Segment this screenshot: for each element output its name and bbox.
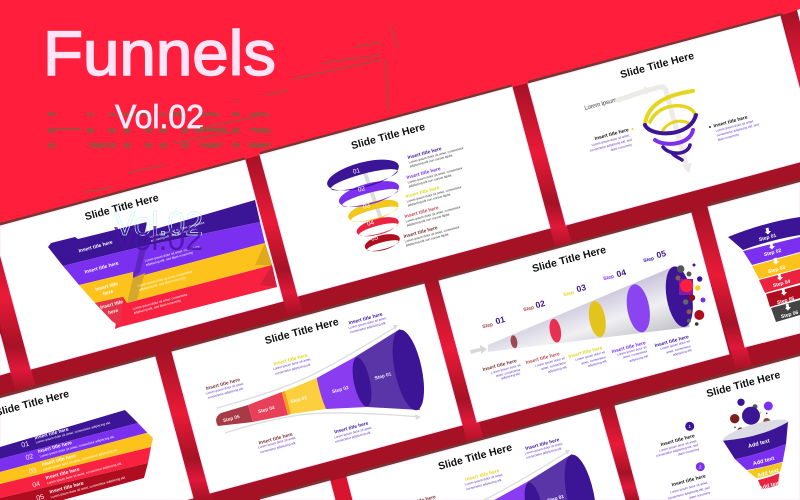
ghost Vol.02 artefact: Vol.02 [114, 205, 203, 242]
ghost Vol.02 artefact: Vol.02 [114, 220, 203, 257]
cone [488, 264, 697, 352]
band labels: Lorem ipsum dolor sit amet, consectetur [149, 220, 206, 239]
stacked bands [0, 410, 153, 500]
step captions: amet, consectetur [622, 349, 649, 360]
step headings: Step [603, 274, 615, 282]
slide title: Slide Title Here [705, 369, 782, 400]
band numbers [21, 441, 45, 500]
ring captions: adipiscing elit non cursus ligula. [408, 173, 453, 188]
ring numbers: 02 [357, 185, 366, 194]
band numbers: 01 [21, 441, 30, 449]
ghost Vol.02 artefact [114, 210, 202, 250]
step labels: Step 01 [758, 233, 777, 243]
item 1: 1 [688, 424, 691, 429]
step headings: 02 [534, 298, 546, 310]
slide: stacked 3D bands [0, 357, 193, 500]
item 1: Insert title here [660, 433, 696, 448]
right caption: Insert title here [713, 114, 749, 129]
step headings [482, 248, 667, 330]
step labels: Step 04 [257, 405, 276, 415]
band text [34, 420, 126, 499]
captions: Insert title here [525, 437, 560, 452]
step labels: Step 03 [767, 265, 786, 275]
item 2: diam nonummy [689, 490, 711, 500]
ring captions: Insert title here [407, 146, 443, 161]
left caption: diam nonummy [610, 142, 633, 152]
funnel labels: Add text [758, 480, 781, 492]
band text: Insert title here [45, 466, 81, 481]
step captions: adipiscing elit [629, 354, 649, 363]
item 1: consectetur adipiscing elit, sed [656, 443, 699, 458]
slide title: Slide Title Here [619, 50, 696, 81]
band text: Lorem ipsum dolor sit amet, consectetur adipiscing elit. [35, 420, 111, 444]
particles [676, 264, 706, 326]
slide: layered bands funnel [0, 160, 283, 369]
ring captions: adipiscing elit non cursus ligula. [409, 153, 454, 168]
ring captions: Insert title here [403, 225, 439, 240]
captions: Insert title here [334, 421, 369, 435]
band labels: Insert title [100, 299, 124, 311]
ring captions: adipiscing elit non cursus ligula. [405, 232, 450, 247]
captions: Lorem ipsum dolor sit amet, [524, 441, 563, 456]
step captions: adipiscing elit [672, 348, 692, 357]
step headings: 01 [494, 314, 506, 326]
step headings: Step [563, 290, 575, 298]
band labels: Lorem ipsum dolor sit amet, consectetur [144, 244, 201, 263]
ring captions: Lorem ipsum dolor sit amet, consectetur [407, 166, 464, 184]
band text: Insert title here [41, 453, 77, 468]
step headings: 05 [655, 248, 667, 260]
ring numbers: 05 [370, 234, 379, 243]
slide title: Slide Title Here [531, 244, 608, 275]
slide: particle funnel [615, 356, 800, 500]
captions: Lorem ipsum dolor sit amet, [464, 472, 503, 487]
ring captions: Insert title here [405, 185, 441, 200]
item 2: 2 [699, 464, 702, 469]
step captions: Lorem ipsum dolor sit [575, 350, 605, 362]
captions: Insert title here [465, 468, 500, 483]
step arrows [765, 228, 791, 310]
step labels: Step 05 [222, 414, 241, 424]
captions: Insert title here [205, 377, 241, 392]
heading: volume: Vol.02 [115, 98, 204, 135]
ring captions: Insert title here [404, 205, 440, 220]
step headings: 04 [615, 267, 627, 279]
step captions: adipiscing elit [501, 372, 520, 380]
item 2: Lorem ipsum dolor sit amet, [670, 480, 709, 494]
slide sliver left [0, 334, 10, 375]
right caption: Lorem ipsum dolor sit amet, [715, 119, 754, 133]
funnel labels: Add text [757, 468, 780, 479]
captions: Lorem ipsum dolor sit amet, [273, 357, 312, 371]
horn funnel graphic [216, 325, 430, 433]
item 2: Insert title here [671, 473, 707, 488]
captions: consectetur adipiscing elit. [349, 321, 387, 334]
step captions: amet, consectetur [666, 344, 692, 355]
band text: Insert title here [34, 426, 70, 441]
slide sliver bottom [260, 481, 335, 500]
funnel labels [748, 438, 781, 492]
captions: Lorem ipsum dolor sit amet, [205, 381, 244, 396]
funnel bands [48, 200, 277, 329]
band labels: Lorem ipsum dolor sit amet, consectetur [132, 292, 189, 311]
slide: horizontal cone funnel [439, 213, 729, 422]
captions: consectetur adipiscing elit. [274, 362, 312, 376]
step labels: Step 02 [763, 248, 782, 258]
slide: horn funnel [172, 284, 462, 493]
band labels: Insert title [95, 281, 119, 293]
band labels: Lorem ipsum dolor sit amet, consectetur [137, 269, 194, 288]
step captions [482, 334, 692, 380]
step labels: Step 01 [374, 371, 392, 382]
slide title: Slide Title Here [84, 192, 160, 223]
band text: Lorem ipsum dolor sit amet, consectetur adipiscing elit. [50, 475, 126, 499]
captions: consectetur adipiscing elit. [465, 478, 503, 491]
band text: Insert title here [37, 440, 73, 455]
band labels: Insert title here [84, 261, 120, 275]
ring captions: Lorem ipsum dolor sit amet, consectetur [406, 185, 463, 203]
band labels: here [107, 308, 119, 316]
band labels: Insert title here [78, 240, 114, 254]
ring captions: Lorem ipsum dolor sit amet, consectetur [405, 205, 462, 223]
heading ghost stripes: Funnels [43, 91, 276, 161]
item 1: diam nonummy [677, 447, 700, 457]
band numbers: 02 [25, 453, 34, 462]
captions: consectetur adipiscing elit. [334, 430, 372, 444]
captions: Insert title here [258, 432, 294, 446]
captions: Insert title here [348, 312, 384, 326]
ring numbers [352, 167, 379, 243]
step labels: Step 06 [780, 310, 799, 320]
step headings: Step [643, 256, 655, 264]
captions: Lorem ipsum dolor sit amet, [258, 435, 297, 450]
band text: Lorem ipsum dolor sit amet, consectetur adipiscing elit. [43, 448, 119, 472]
left caption: Lorem ipsum dolor sit amet, [591, 133, 630, 147]
spiral funnel graphic [618, 86, 696, 173]
ring numbers: 04 [366, 219, 375, 228]
horn funnel graphic [389, 450, 602, 500]
ring captions: Lorem ipsum dolor sit amet, consectetur [408, 146, 465, 164]
funnel labels: Add text [752, 456, 775, 467]
band text: Lorem ipsum dolor sit amet, consectetur adipiscing elit. [47, 461, 123, 485]
step captions: Insert title here [568, 345, 603, 360]
step labels: Step 03 [290, 395, 308, 405]
captions: Insert title here [273, 353, 309, 367]
slide sliver top right [797, 9, 800, 22]
right caption: consectetur adipiscing elit, sed [716, 122, 759, 137]
band text: Lorem ipsum dolor sit amet, consectetur adipiscing elit. [39, 434, 115, 458]
slide: horn funnel bottom [347, 409, 625, 500]
captions [205, 312, 387, 454]
step captions: Insert title here [654, 334, 690, 349]
left caption [589, 127, 634, 153]
step captions: amet, consectetur [495, 367, 522, 378]
step headings: Step [482, 322, 494, 330]
band labels: adipiscing elit, sed diam nonummy [145, 250, 194, 267]
input arrow [470, 345, 487, 354]
slide: ring funnel [260, 87, 550, 296]
band labels: adipiscing elit, sed diam nonummy [150, 226, 199, 243]
step labels [222, 371, 392, 424]
step captions: Lorem ipsum dolor sit [535, 356, 565, 368]
step labels [758, 233, 799, 320]
captions: Lorem ipsum dolor sit amet, [348, 316, 387, 330]
band numbers: 04 [32, 481, 41, 489]
captions [401, 437, 563, 500]
band labels [78, 220, 206, 316]
captions: consectetur adipiscing elit. [525, 446, 563, 460]
left caption: Insert title here [594, 127, 630, 142]
funnel labels: Add text [748, 438, 771, 450]
step captions: adipiscing elit [547, 365, 567, 374]
ring captions: adipiscing elit non cursus ligula. [406, 212, 451, 227]
shadow streaks [85, 25, 398, 192]
ring captions: Lorem ipsum dolor sit amet, consectetur [404, 225, 461, 243]
item 1 [656, 422, 700, 458]
slide title: Slide Title Here [437, 442, 514, 473]
right caption [709, 114, 759, 142]
captions: consectetur adipiscing elit. [259, 441, 297, 454]
slide: stepped funnel [708, 182, 800, 347]
band labels: adipiscing elit, sed diam nonummy [138, 275, 187, 292]
step captions: adipiscing elit [587, 359, 607, 368]
particles [730, 399, 773, 434]
step headings: Step [523, 305, 535, 313]
right caption: diam nonummy [717, 132, 740, 142]
ring numbers: 03 [362, 202, 371, 211]
slide title: Slide Title Here [264, 316, 340, 347]
band labels: here [102, 289, 114, 297]
slide title: Slide Title Here [350, 121, 427, 152]
captions: consectetur adipiscing elit. [207, 386, 244, 400]
step captions: Insert title here [525, 351, 561, 366]
funnel [721, 415, 790, 489]
heading: Funnels: Funnels [43, 19, 276, 89]
ring funnel graphic [324, 153, 402, 255]
step labels: Step 02 [331, 385, 350, 395]
step captions: Lorem ipsum dolor sit [616, 345, 647, 357]
step captions: Lorem ipsum dolor sit [490, 363, 521, 375]
ring numbers: 01 [352, 167, 361, 176]
left caption: consectetur adipiscing elit, sed [589, 138, 632, 153]
ring captions [403, 146, 465, 247]
step headings: 03 [575, 282, 587, 294]
step captions: amet, consectetur [581, 355, 607, 366]
step labels: Step 05 [776, 296, 795, 306]
slide: spiral funnel [528, 16, 800, 225]
step captions: Insert title here [482, 358, 518, 373]
item 1: Lorem ipsum dolor sit amet, [659, 439, 698, 453]
step captions: amet, consectetur [541, 360, 567, 371]
band numbers: 03 [28, 467, 38, 476]
band text: Insert title here [49, 480, 85, 495]
band labels: adipiscing elit, sed diam nonummy [133, 298, 182, 315]
ring captions: adipiscing elit non cursus ligula. [407, 192, 452, 207]
label: Lorem Ipsum: Lorem Ipsum [584, 98, 617, 112]
funnel steps [728, 217, 800, 322]
item 2 [667, 462, 711, 500]
step captions: Insert title here [611, 340, 647, 355]
step captions: Lorem ipsum dolor sit [660, 339, 690, 351]
step labels: Step 04 [772, 279, 791, 289]
captions: Lorem ipsum dolor sit amet, [334, 425, 373, 440]
ring captions: Insert title here [406, 166, 442, 181]
